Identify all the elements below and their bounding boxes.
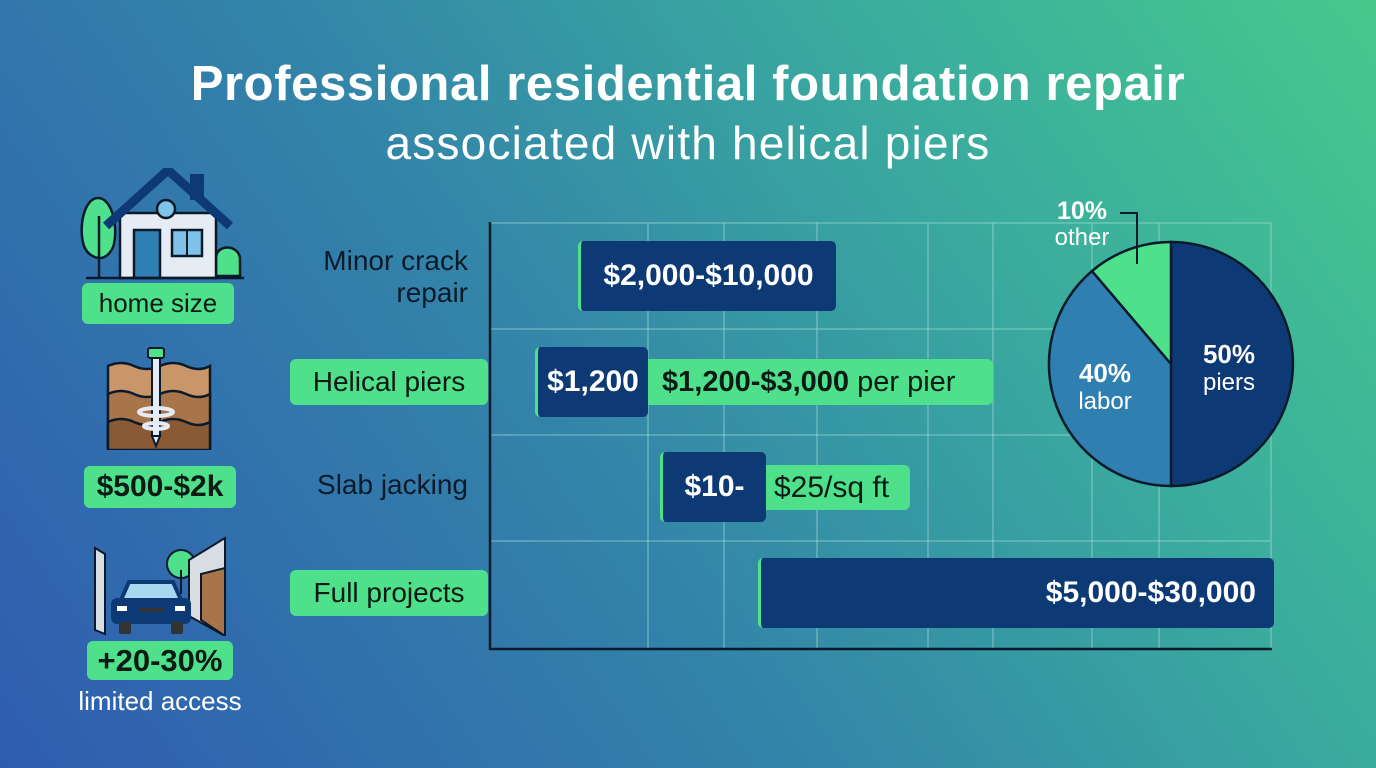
subtitle: associated with helical piers xyxy=(386,117,990,169)
category: Minor crack repair: repair xyxy=(396,277,468,308)
bar: slab jacking range xyxy=(760,465,910,510)
label: home size xyxy=(82,283,234,324)
bar: slab jacking range: $25/sq ft xyxy=(774,470,889,504)
pie chart: 50% xyxy=(1203,339,1255,369)
category: Full projects xyxy=(290,570,488,616)
bar: helical piers range: per pier xyxy=(857,366,955,398)
pie chart: other xyxy=(1055,224,1109,251)
bar: minor crack: $2,000-$10,000 xyxy=(603,259,814,292)
category: Full projects: Full projects xyxy=(314,577,464,608)
pie chart: 10% xyxy=(1057,197,1107,225)
pie chart xyxy=(1048,197,1294,488)
category: Minor crack repair: Minor crack xyxy=(323,245,468,276)
icon: car limited access xyxy=(94,536,226,636)
label: +20-30%: +20-30% xyxy=(98,642,222,678)
category: Helical piers: Helical piers xyxy=(313,366,465,397)
pie chart: 40% xyxy=(1079,358,1131,388)
bar: minor crack xyxy=(578,241,836,311)
category: Helical piers xyxy=(290,359,488,405)
bar: helical piers range: $1,200-$3,000 xyxy=(662,366,849,398)
icon: helical pier in soil xyxy=(106,347,212,450)
label: $500-$2k xyxy=(84,466,236,508)
bar: helical pier low: $1,200 xyxy=(547,365,639,398)
pie chart: piers xyxy=(1203,369,1255,396)
icon: house xyxy=(80,168,244,280)
bar: slab low: $10- xyxy=(684,470,745,503)
label: $500-$2k: $500-$2k xyxy=(97,470,223,503)
text: limited access: limited access xyxy=(78,686,242,716)
bar: helical piers range xyxy=(640,359,993,405)
title: Professional residential foundation repair xyxy=(191,57,1185,111)
bar: helical pier low xyxy=(535,347,648,417)
label: home size: home size xyxy=(99,288,217,318)
pie chart: labor xyxy=(1078,388,1132,415)
bar: full projects xyxy=(758,558,1274,628)
category: Slab jacking: Slab jacking xyxy=(317,469,468,500)
bar: full projects: $5,000-$30,000 xyxy=(1046,576,1256,609)
bar: slab low xyxy=(660,452,766,522)
category: Minor crack repair xyxy=(323,245,468,308)
